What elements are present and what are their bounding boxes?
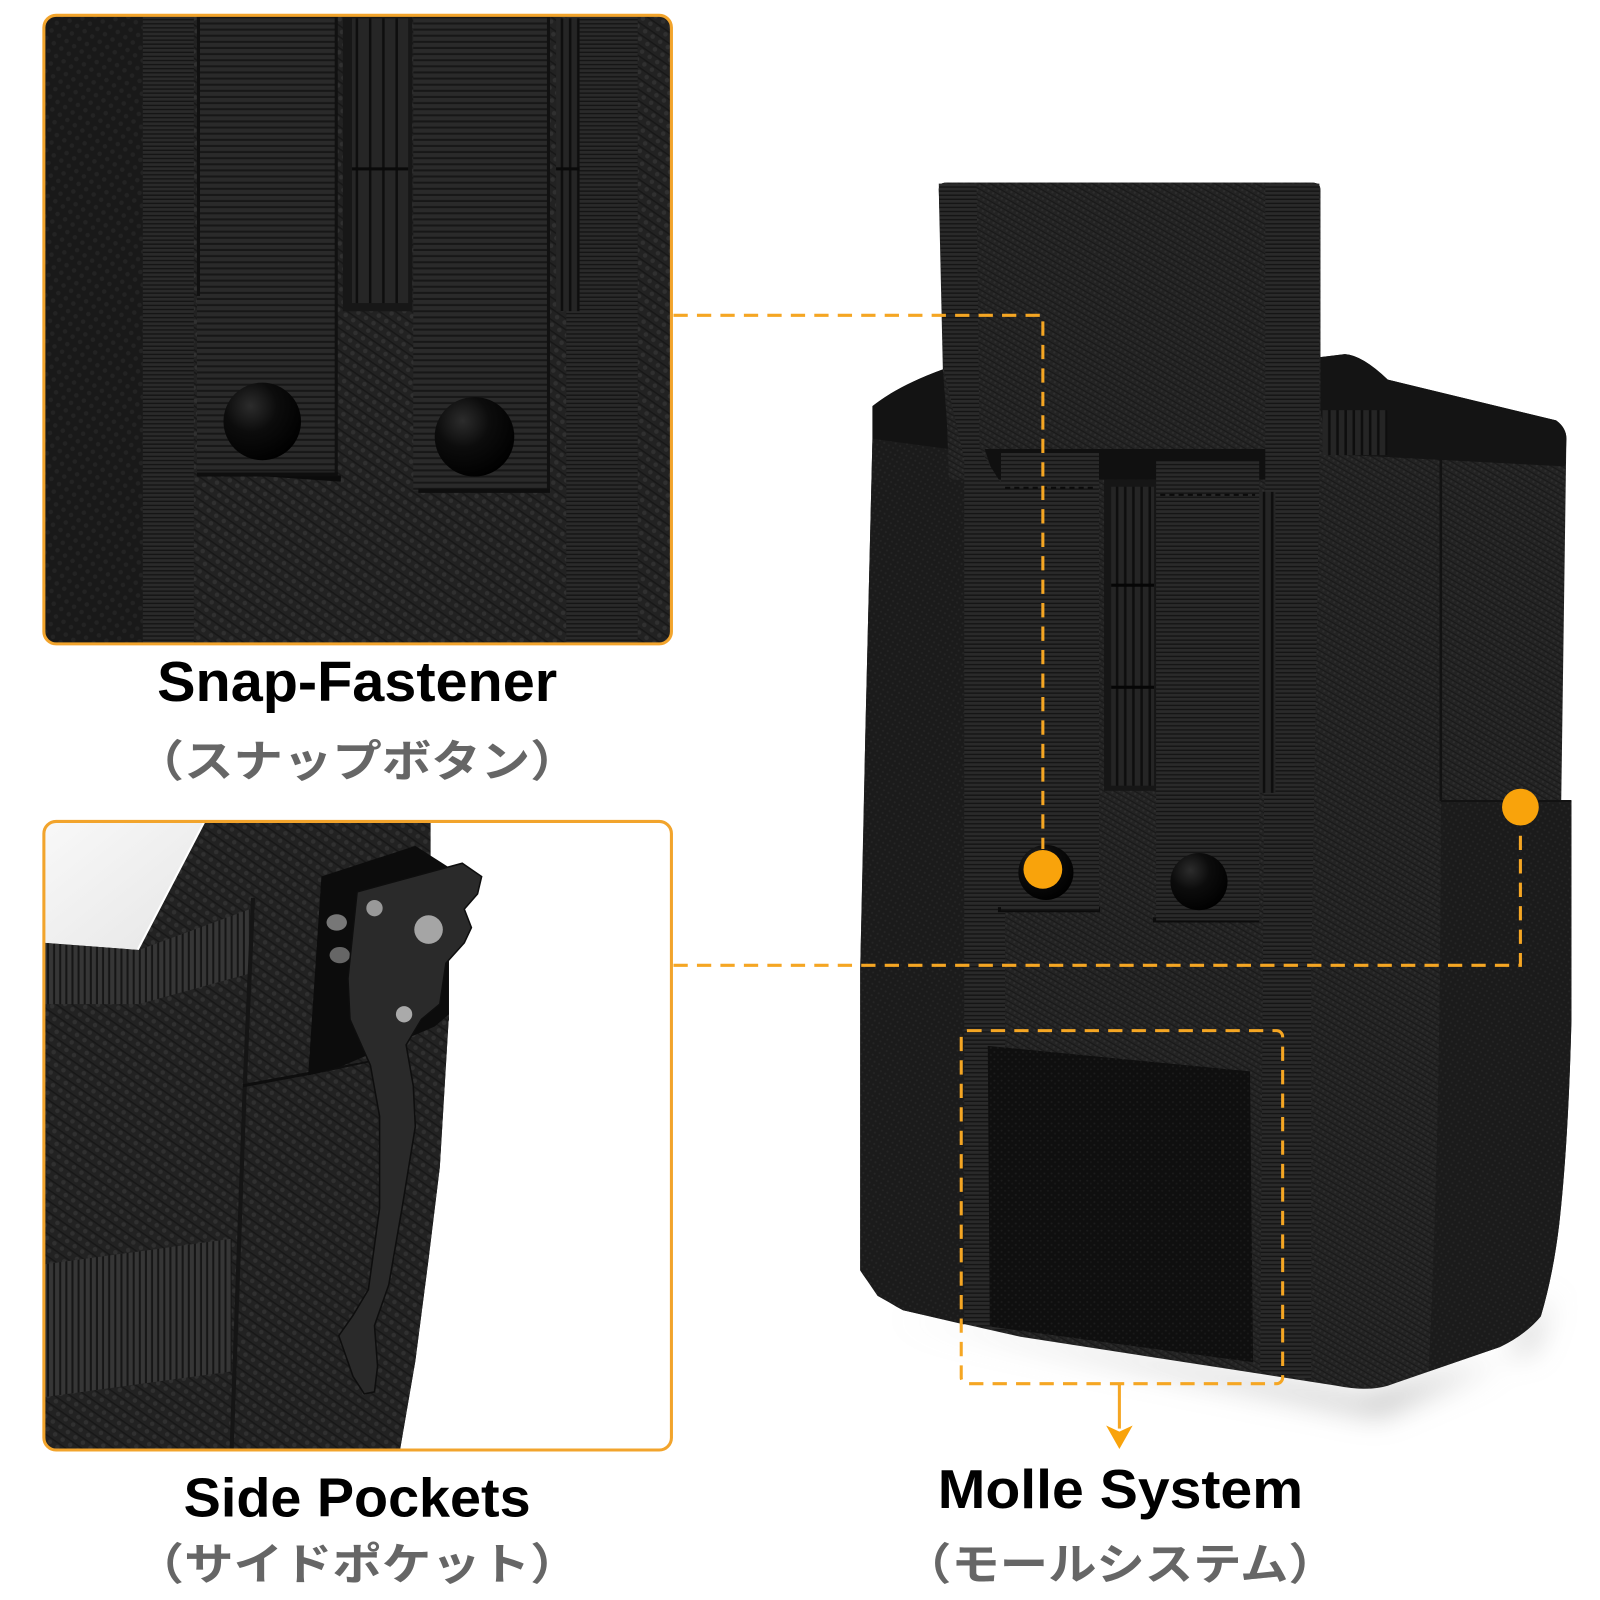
webbing: upper band — [45, 909, 250, 1004]
top binding left — [872, 369, 949, 449]
callout dot: side pockets — [1502, 789, 1539, 826]
flap — [939, 183, 1320, 480]
webbing strip left — [939, 184, 1005, 1332]
icon: snap button right — [435, 397, 514, 477]
velcro patch — [988, 1046, 1253, 1362]
panel: side pockets close-up — [44, 821, 671, 1450]
strap: right — [413, 15, 550, 493]
strap: left — [194, 15, 341, 482]
panel: snap-fastener close-up — [44, 15, 671, 644]
callout line: side pockets — [673, 827, 1520, 965]
top binding right — [1320, 354, 1566, 466]
text: モールシステム: （モールシステム） — [903, 1541, 1337, 1590]
heading: Snap-Fastener: Snap-Fastener — [157, 650, 557, 713]
left side panel — [860, 439, 964, 1324]
elastic loops — [1104, 480, 1276, 793]
arrow: molle system — [1106, 1384, 1133, 1449]
webbing strip right — [1260, 184, 1319, 1380]
callout box: molle system — [961, 1031, 1283, 1384]
side pocket — [1429, 801, 1571, 1371]
heading: Side Pockets: Side Pockets — [184, 1466, 531, 1528]
text: スナップボタン: （スナップボタン） — [135, 738, 580, 787]
strap: right — [1153, 461, 1259, 922]
shadow under bag — [898, 1296, 1551, 1413]
heading: Molle System: Molle System — [938, 1458, 1303, 1520]
icon: snap button left — [1018, 845, 1073, 900]
bag: main product photo — [860, 183, 1571, 1389]
callout dot: snap-fastener — [1023, 850, 1062, 889]
webbing: lower band — [45, 1239, 232, 1397]
text: サイドポケット: （サイドポケット） — [135, 1541, 580, 1590]
bag body — [860, 183, 1571, 1389]
icon: snap button right — [1170, 853, 1228, 910]
callout line: snap-fastener — [673, 315, 1043, 849]
icon: folding knife with pocket clip — [306, 846, 482, 1450]
icon: snap button left — [223, 383, 301, 460]
flap bottom shadow — [985, 449, 1316, 480]
strap: left — [998, 453, 1100, 912]
